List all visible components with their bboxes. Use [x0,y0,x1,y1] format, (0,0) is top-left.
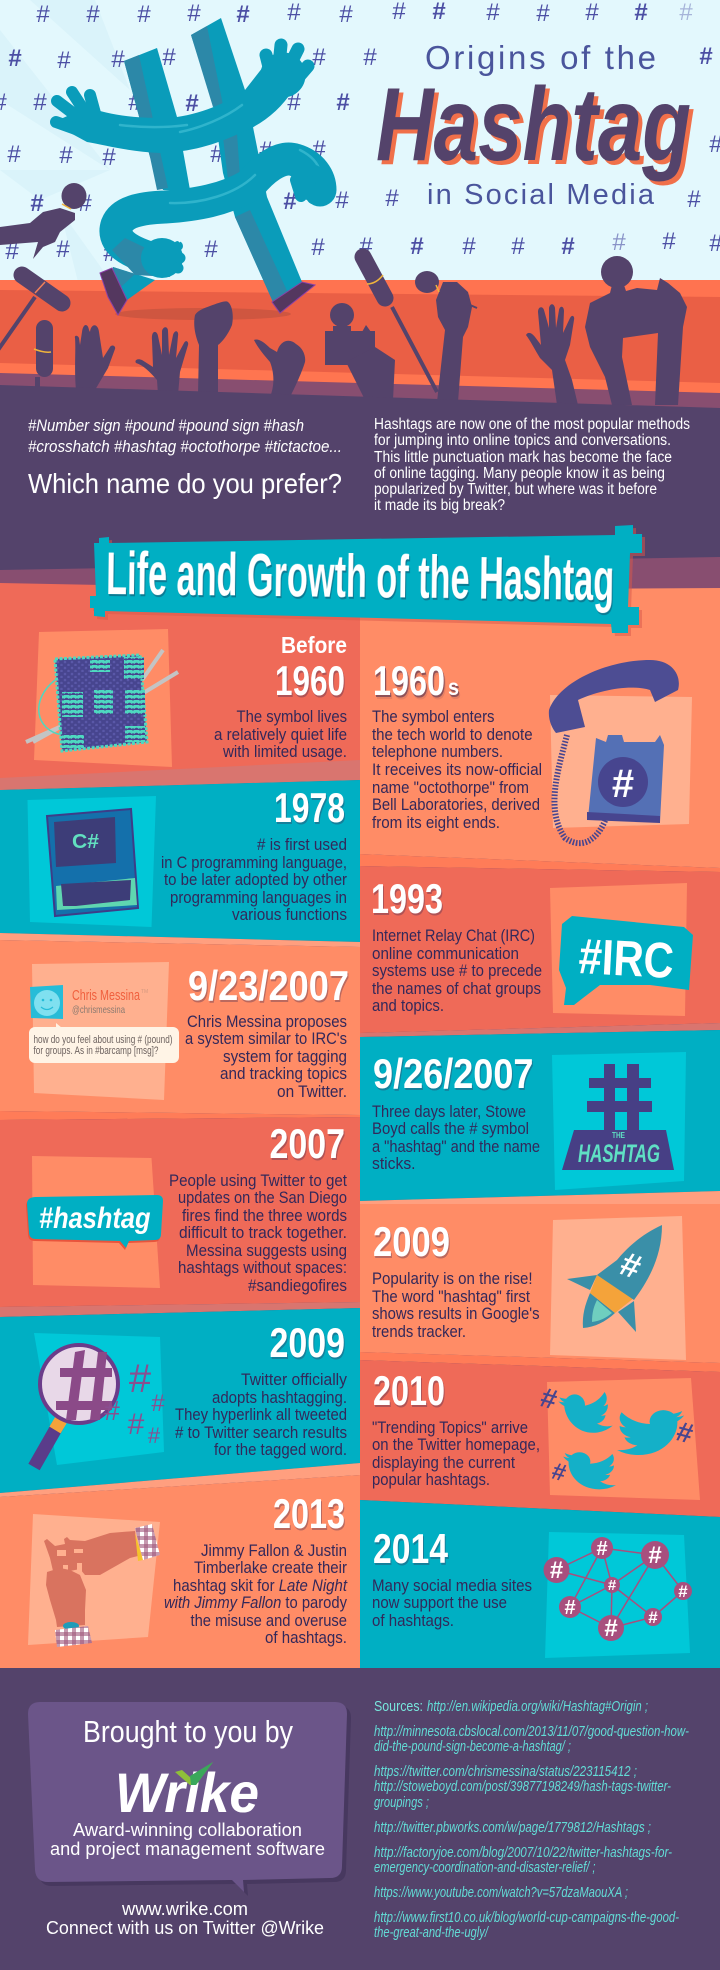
description: sticks. [372,1155,416,1173]
description: Three days later, Stowe [372,1103,526,1121]
description [164,1542,348,1647]
year heading: 1993 [371,875,443,922]
heading banner: life and growth of the hashtag [90,525,645,636]
description [372,1103,540,1173]
description: systems use # to precede [372,962,542,980]
icon: rocket: # [615,1245,646,1287]
icon: hashtag network: # [678,1582,688,1601]
title: Origins of the [425,39,656,76]
year heading: 9/23/2007 [188,962,349,1009]
description: online communication [372,945,519,963]
background hash pattern: # [57,47,71,74]
open hand 3 [526,304,578,405]
lower gripping hand [141,228,186,278]
description: They hyperlink all tweeted [175,1406,347,1424]
description: adopts hashtagging. [212,1389,347,1407]
intro paragraph [374,416,690,514]
panel: 2009 popularity [360,1204,720,1372]
background hash pattern: # [236,1,250,28]
sources list: groupings ; [374,1795,429,1811]
year heading: 1978 [274,784,345,831]
callout: brought to you by Wrike: Brought to you by [83,1714,293,1749]
background hash pattern: # [162,44,176,71]
panel: 2014 [360,1500,720,1670]
icon: magnifying glass: # [148,1423,161,1448]
intro paragraph: for jumping into online topics and conversations. [374,432,671,449]
description [372,1577,532,1630]
icon: hands making a hash [44,1524,160,1647]
camera with hand [325,303,395,400]
icon: computer: C# [72,831,99,853]
background hash pattern: # [30,190,44,217]
icon: hashtag speech bubble: #hashtag [39,1202,151,1235]
icon: twitter birds: # [673,1415,697,1450]
icon: magnifying glass: # [129,1357,152,1401]
icon: tweet by Chris Messina [29,985,179,1063]
description: system for tagging [223,1048,347,1066]
contact details [46,1899,324,1938]
description: difficult to track together. [179,1224,347,1242]
description: with limited usage. [222,743,347,761]
description: #sandiegofires [248,1277,347,1295]
description [372,1419,540,1489]
background hash pattern: # [385,185,399,212]
description [161,836,347,924]
panel: before 1960 [0,583,360,790]
shoes [272,282,315,313]
intro paragraph: Hashtags are now one of the most popular methods [374,416,690,433]
callout: brought to you by Wrike [28,1702,351,1896]
bottom hand [46,1568,86,1627]
description: the misuse and overuse [190,1612,347,1630]
left vertical bar [124,48,190,190]
boom mic, left [0,275,62,350]
background hash pattern: # [336,89,350,116]
background hash pattern: # [283,188,297,215]
description: a "hashtag" and the name [372,1138,540,1156]
right raised hand [266,45,308,91]
sources list: http://en.wikipedia.org/wiki/Hashtag#Origin ; [427,1699,648,1715]
left leg [112,267,155,300]
background hash pattern: # [33,89,47,116]
background hash pattern [0,0,720,267]
icon: twitter birds [537,1381,697,1489]
raised fist [194,301,233,395]
background hash pattern: # [137,1,151,28]
description: Chris Messina proposes [187,1013,347,1031]
description: hashtag skit for Late Night [173,1577,348,1595]
background hash pattern: # [462,233,476,260]
title [376,39,695,211]
description: with Jimmy Fallon to parody [164,1594,348,1612]
icon: telephone [549,660,679,843]
shadow under hash character [115,308,291,320]
contact details: Connect with us on Twitter @Wrike [46,1918,324,1938]
background hash pattern: # [187,0,201,27]
description: Bell Laboratories, derived [372,796,540,814]
icon: magnifying glass [34,1345,165,1467]
description: popular hashtags. [372,1471,490,1489]
description: Timberlake create their [194,1559,347,1577]
description: and topics. [372,997,444,1015]
background hash pattern: # [687,186,701,213]
background hash pattern: # [185,90,199,117]
icon: tweet by Chris Messina: @chrismessina [72,1004,125,1016]
year heading: 1960 [275,657,345,704]
background hash pattern: # [662,228,676,255]
purple intro section [0,385,720,600]
description: Popularity is on the rise! [372,1270,533,1288]
intro paragraph: This little punctuation mark has become the face [374,449,672,466]
description: for the tagged word. [214,1441,347,1459]
icon: telephone: # [612,762,634,806]
background hash pattern: # [56,236,70,263]
background hash pattern: # [78,190,92,217]
lower right hand [296,170,325,198]
icon: hashtag network [544,1537,692,1642]
description [372,927,542,1015]
callout: brought to you by Wrike: Award-winning collaboration [73,1820,302,1840]
panel: 2009 twitter [0,1308,360,1497]
open hand 1 [75,325,115,390]
description: a system similar to IRC's [185,1030,347,1048]
year heading: 2010 [373,1367,445,1414]
intro paragraph: popularized by Twitter, but where was it before [374,481,657,498]
description: # is first used [257,836,347,854]
description: Boyd calls the # symbol [372,1120,529,1138]
description: People using Twitter to get [169,1172,347,1190]
icon: hashtag network: # [608,1577,617,1594]
description [175,1371,348,1459]
background hash pattern: # [312,136,326,163]
background hash pattern: # [36,1,50,28]
year heading: 2007 [270,1120,345,1167]
description: in C programming language, [161,854,347,872]
open hand 2 [135,327,188,395]
panel: 2013 [0,1475,360,1668]
header sky background [0,0,720,300]
background hash pattern: # [8,45,22,72]
icon: the hashtag monument [562,1064,674,1170]
description: of hashtags. [265,1629,347,1647]
background hash pattern: # [204,236,218,263]
description: the tech world to denote [372,726,533,744]
year heading [275,632,347,704]
background hash pattern: # [86,1,100,28]
background hash pattern: # [128,89,142,116]
hashtag names [28,416,342,456]
panel: 9/26/2007 [360,1030,720,1204]
illustration: running hash character [52,18,325,315]
year heading: Before [281,632,347,658]
year heading: 9/26/2007 [373,1050,534,1097]
description: telephone numbers. [372,743,503,761]
description: Twitter officially [241,1371,348,1389]
description: Internet Relay Chat (IRC) [372,927,535,945]
description: to be later adopted by other [164,871,347,889]
description: shows results in Google's [372,1305,540,1323]
description: a relatively quiet life [214,726,347,744]
background hash pattern: # [59,142,73,169]
boom mic, centre [363,257,437,392]
panel: 9/23/2007 [0,940,360,1120]
description [169,1172,347,1295]
icon: hashtag network: # [564,1597,576,1619]
background hash pattern: # [102,144,116,171]
background hash pattern: # [7,141,21,168]
sources list: https://www.youtube.com/watch?v=57dzaMaouXA ; [374,1885,628,1901]
background hash pattern: # [511,233,525,260]
right vertical bar and leg [191,18,302,302]
background hash pattern: # [259,137,273,164]
year heading: 1960 [373,657,445,704]
sources list: Sources: [374,1699,423,1715]
description: trends tracker. [372,1323,466,1341]
background hash pattern: # [5,238,19,265]
description: The symbol lives [236,708,347,726]
background hash pattern: # [359,233,373,260]
background hash pattern: # [339,1,353,28]
upper arm [52,67,293,153]
description: now support the use [372,1594,507,1612]
background hash pattern: # [335,187,349,214]
sources list: the-great-and-the-ugly/ [374,1925,490,1941]
icon: IRC speech bubble [559,916,693,1005]
icon: knitted hash [26,650,178,751]
description: on the Twitter homepage, [372,1436,540,1454]
year heading: 2009 [373,1218,450,1265]
description [372,708,542,832]
icon: hashtag network: # [648,1608,658,1627]
crowd silhouettes [0,183,687,405]
icon: twitter birds: # [549,1458,569,1487]
icon: tweet by Chris Messina: Chris Messina [72,987,140,1004]
icon: hashtag network: # [596,1538,608,1560]
panel: 1960s [360,588,720,872]
description: Many social media sites [372,1577,532,1595]
hashtag names: #crosshatch #hashtag #octothorpe #tictactoe... [28,437,342,456]
mic in raised hand, top left [0,183,86,259]
icon: twitter birds: # [537,1381,561,1416]
sources list [374,1699,689,1941]
background hash pattern: # [363,44,377,71]
icon: rocket [567,1225,662,1332]
background hash pattern: # [561,233,575,260]
intro paragraph: it made its big break? [374,497,505,514]
lower arm [116,159,320,258]
question: Which name do you prefer? [28,468,342,499]
panel: 1993 [360,866,720,1037]
handheld mic, left [34,320,53,389]
thumbs up [254,339,305,397]
description: The symbol enters [372,708,494,726]
description: of hashtags. [372,1612,454,1630]
logo: Wrike: Wrike [115,1761,259,1824]
icon: magnifying glass: # [128,1408,145,1441]
description: The word "hashtag" first [372,1288,530,1306]
title: in Social Media [427,179,655,211]
photographer silhouette [585,256,687,405]
year heading: 2013 [273,1490,345,1537]
description: displaying the current [372,1454,515,1472]
description: updates on the San Diego [178,1189,347,1207]
year heading: 2014 [373,1525,449,1572]
panel: 2010 [360,1360,720,1517]
background hash pattern: # [312,44,326,71]
left raised hand [56,92,96,132]
description [214,708,347,761]
icon: magnifying glass: # [104,1395,120,1426]
hashtag names: #Number sign #pound #pound sign #hash [28,416,304,435]
description: the names of chat groups [372,980,541,998]
sources list: did-the-pound-sign-become-a-hashtag/ ; [374,1739,571,1755]
description: "Trending Topics" arrive [372,1419,528,1437]
description: Messina suggests using [186,1242,347,1260]
top hand [44,1531,138,1575]
sources list: emergency-coordination-and-disaster-relief/ ; [374,1860,596,1876]
icon: IRC speech bubble: #IRC [577,928,675,989]
year heading: s [448,674,459,700]
stage: orange band [0,280,720,420]
panel: 1978 [0,780,360,947]
description [372,1270,540,1341]
description: from its eight ends. [372,814,500,832]
background hash pattern: # [111,46,125,73]
description: Jimmy Fallon & Justin [201,1542,347,1560]
description: # to Twitter search results [175,1424,347,1442]
icon: the hashtag monument: HASHTAG [578,1140,660,1168]
background hash pattern: # [410,233,424,260]
description [185,1013,347,1101]
background hash pattern: # [612,229,626,256]
handheld mic and hand [415,271,477,402]
sources list: http://twitter.pbworks.com/w/page/1779812/Hashtags ; [374,1820,651,1836]
icon: hashtag network: # [648,1542,662,1569]
description: and tracking topics [220,1065,347,1083]
icon: tweet by Chris Messina: for groups. As in #barcamp [msg]? [34,1045,158,1057]
description: on Twitter. [277,1083,347,1101]
year heading: 2009 [270,1319,345,1366]
icon: the hashtag monument: THE [612,1131,626,1140]
intro paragraph: of online tagging. Many people know it as being [374,465,665,482]
panel: 2007 [0,1117,360,1317]
sources list: https://twitter.com/chrismessina/status/223115412 ; [374,1764,637,1780]
background hash pattern: # [536,0,550,27]
background hash pattern: # [311,234,325,261]
description: fires find the three words [182,1207,347,1225]
description: name "octothorpe" from [372,779,529,797]
footer [0,1668,720,1970]
background hash pattern: # [103,240,117,267]
icon: tweet by Chris Messina: how do you feel about using # (pound) [34,1034,172,1046]
description: hashtags without spaces: [178,1259,347,1277]
description: It receives its now-official [372,761,542,779]
contact details: www.wrike.com [121,1899,248,1919]
icon: hashtag network: # [550,1557,563,1584]
icon: hashtag network: # [604,1615,618,1642]
icon: hashtag speech bubble [26,1195,163,1250]
background hash pattern: # [287,89,301,116]
description: various functions [232,906,347,924]
icon: tweet by Chris Messina: TM [141,989,148,995]
description: programming languages in [170,889,347,907]
callout: brought to you by Wrike: and project management software [50,1839,325,1859]
background hash pattern: # [210,141,224,168]
background hash pattern: # [699,43,713,70]
icon: magnifying glass: # [151,1390,165,1417]
icon: computer [47,809,138,916]
